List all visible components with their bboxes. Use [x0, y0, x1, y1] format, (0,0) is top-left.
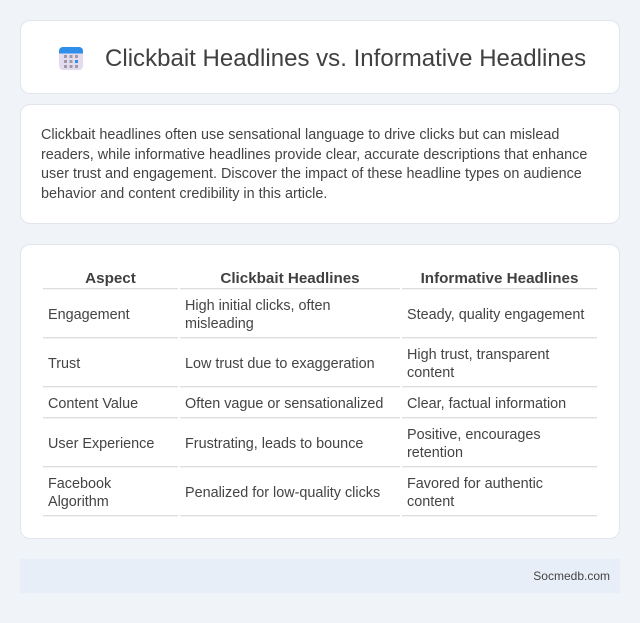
row: content value: Content Value	[48, 396, 138, 412]
table card	[20, 244, 620, 539]
user experience informative	[407, 427, 541, 461]
user experience clickbait: Frustrating, leads to bounce	[185, 436, 363, 452]
intro text: Clickbait headlines often use sensational language to drive clicks but can mislead	[41, 127, 559, 143]
trust informative	[407, 347, 550, 381]
engagement clickbait: misleading	[185, 316, 254, 332]
facebook algorithm clickbait: Penalized for low-quality clicks	[185, 485, 380, 501]
header card	[20, 20, 620, 94]
trust informative: content	[407, 365, 454, 381]
footer credit: Socmedb.com	[533, 569, 610, 583]
row: engagement: Engagement	[48, 307, 130, 323]
intro card	[20, 104, 620, 224]
intro text: behavior and content credibility in this article.	[41, 186, 327, 202]
intro text	[41, 127, 587, 202]
engagement clickbait	[185, 298, 331, 332]
icon: calendar	[59, 47, 83, 70]
user experience informative: Positive, encourages	[407, 427, 541, 443]
intro text: user trust and engagement. Discover the impact of these headline types on audience	[41, 166, 582, 182]
row: trust: Trust	[48, 356, 80, 372]
intro text: readers, while informative headlines provide clear, accurate descriptions that enhance	[41, 147, 587, 163]
header: informative: Informative Headlines	[421, 270, 578, 287]
facebook algorithm informative: Favored for authentic	[407, 476, 543, 492]
content value informative: Clear, factual information	[407, 396, 566, 412]
row: facebook algorithm: Algorithm	[48, 494, 109, 510]
facebook algorithm informative: content	[407, 494, 454, 510]
header: aspect: Aspect	[85, 270, 136, 287]
row: user experience: User Experience	[48, 436, 154, 452]
engagement informative: Steady, quality engagement	[407, 307, 584, 323]
trust informative: High trust, transparent	[407, 347, 549, 363]
header: clickbait: Clickbait Headlines	[220, 270, 360, 287]
engagement clickbait: High initial clicks, often	[185, 298, 331, 314]
comparison table	[43, 268, 597, 517]
trust clickbait: Low trust due to exaggeration	[185, 356, 375, 372]
facebook algorithm informative	[407, 476, 543, 510]
row: facebook algorithm: Facebook	[48, 476, 111, 492]
footer bar	[20, 559, 620, 593]
title: Clickbait Headlines vs. Informative Headlines	[105, 45, 586, 72]
user experience informative: retention	[407, 445, 463, 461]
content value clickbait: Often vague or sensationalized	[185, 396, 383, 412]
row: facebook algorithm	[48, 476, 112, 510]
